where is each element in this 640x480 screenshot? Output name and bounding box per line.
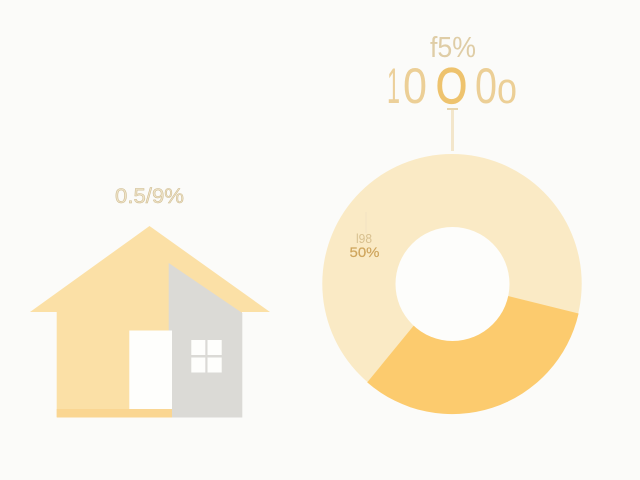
top large number: o — [497, 64, 517, 113]
house door — [129, 330, 172, 409]
top large number — [387, 58, 517, 114]
icon: house — [30, 226, 270, 418]
top large number: O — [436, 58, 467, 114]
donut hole — [396, 227, 510, 341]
donut chart — [322, 154, 582, 414]
top large number: 1 — [387, 58, 400, 114]
donut light segment — [322, 154, 582, 413]
connector line — [447, 108, 458, 151]
house base strip — [57, 409, 172, 418]
house roof and left wall — [30, 226, 270, 417]
house window — [191, 340, 222, 372]
donut segment label: 50% — [350, 244, 380, 260]
donut dark segment — [367, 296, 579, 414]
top large number: 0 — [475, 58, 497, 114]
top large number: 0 — [403, 58, 427, 114]
donut segment label — [350, 212, 380, 260]
house grey wall — [169, 263, 242, 418]
house percentage label: 0.5/9% — [115, 185, 184, 208]
donut segment label: l98 — [356, 231, 372, 246]
top small percentage label: f5% — [430, 32, 476, 64]
